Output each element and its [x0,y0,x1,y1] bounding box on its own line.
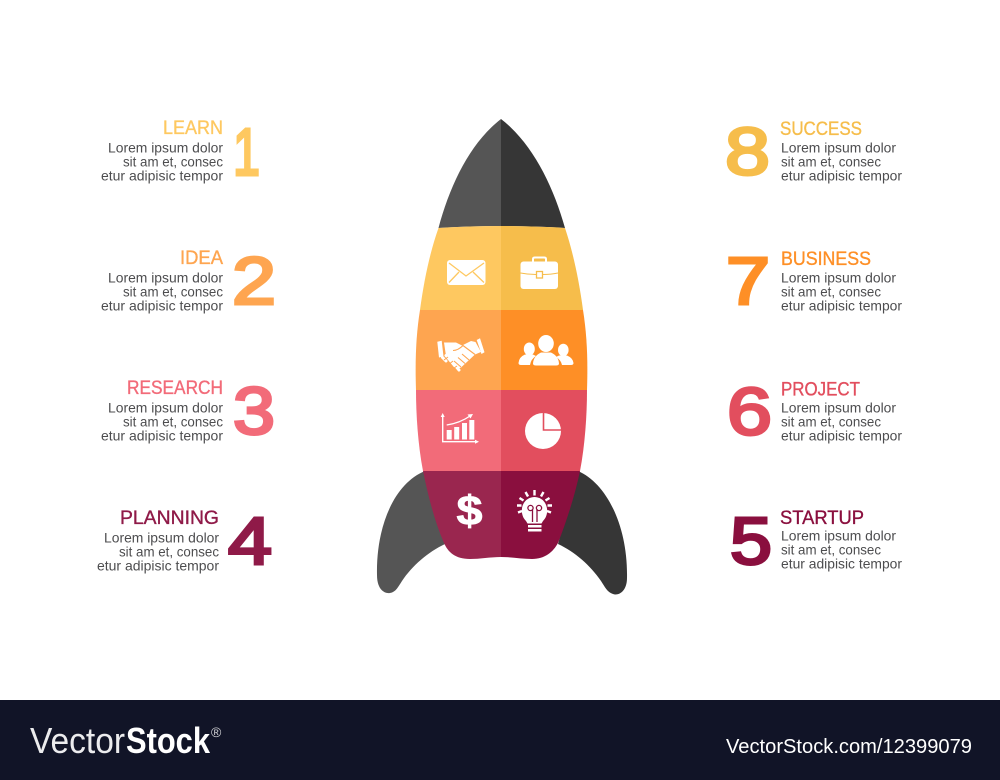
number: 2 [232,244,276,319]
text block: sit am et, consec [123,154,223,170]
text block: sit am et, consec [123,284,223,300]
text block: sit am et, consec [123,414,223,430]
icon: light bulb [517,490,552,532]
number: 4 [228,504,272,579]
heading: LEARN [163,118,223,139]
item 3: research [101,374,275,449]
rocket [377,119,627,594]
icon: people [518,335,574,366]
text block: Lorem ipsum dolor [781,400,896,416]
right fin [558,471,627,594]
icon: dollar: $ [456,487,482,534]
item 1: learn [101,115,260,190]
orange band [416,310,587,390]
text block: Lorem ipsum dolor [781,270,896,286]
image id: VectorStock.com/12399079 [726,736,972,758]
item 4: planning [97,504,272,579]
text block [781,140,902,184]
number: 8 [725,114,770,190]
heading: PLANNING [120,508,219,529]
logo: Vector [30,720,125,761]
left fin [377,471,445,593]
item 5: startup [730,504,902,579]
text block [101,140,223,184]
number: 5 [730,504,772,579]
text block: Lorem ipsum dolor [781,140,896,156]
text block: etur adipisic tempor [781,428,902,444]
text block: Lorem ipsum dolor [108,140,223,156]
text block: sit am et, consec [781,414,881,430]
text block: sit am et, consec [119,544,219,560]
heading: BUSINESS [781,249,871,270]
icon: envelope [447,260,486,285]
text block: etur adipisic tempor [101,428,223,444]
pink band [416,390,587,471]
logo: Stock [126,720,211,761]
item 6: project [727,374,902,450]
yellow band [420,226,583,310]
text block: sit am et, consec [781,542,881,558]
heading: PROJECT [781,380,860,400]
text block: etur adipisic tempor [101,298,223,314]
heading: RESEARCH [127,378,223,399]
item 2: idea [101,244,276,319]
text block [781,528,902,572]
heading: SUCCESS [780,119,862,140]
text block: Lorem ipsum dolor [108,270,223,286]
number: 3 [233,374,275,449]
text block: etur adipisic tempor [97,558,219,574]
icon: briefcase [520,258,558,289]
text block [97,530,219,574]
number: 6 [727,374,772,450]
logo [30,720,222,761]
text block: Lorem ipsum dolor [781,528,896,544]
text block: sit am et, consec [781,284,881,300]
text block [781,270,902,314]
heading: IDEA [180,248,223,269]
text block: Lorem ipsum dolor [108,400,223,416]
icon: pie chart [525,412,562,449]
text block: etur adipisic tempor [101,168,223,184]
logo: ® [211,724,222,740]
text block [781,400,902,444]
heading: STARTUP [780,508,864,529]
number: 1 [233,115,260,190]
icon: handshake [437,338,484,370]
text block: etur adipisic tempor [781,556,902,572]
text block: sit am et, consec [781,154,881,170]
number: 7 [726,244,770,319]
maroon band [423,471,580,559]
item 8: success [725,114,902,190]
item 7: business [726,244,902,319]
text block [101,400,223,444]
text block [101,270,223,314]
text block: etur adipisic tempor [781,168,902,184]
text block: Lorem ipsum dolor [104,530,219,546]
icon: bar chart [441,413,479,444]
text block: etur adipisic tempor [781,298,902,314]
nose cone [438,119,565,228]
footer bar [0,700,1000,780]
